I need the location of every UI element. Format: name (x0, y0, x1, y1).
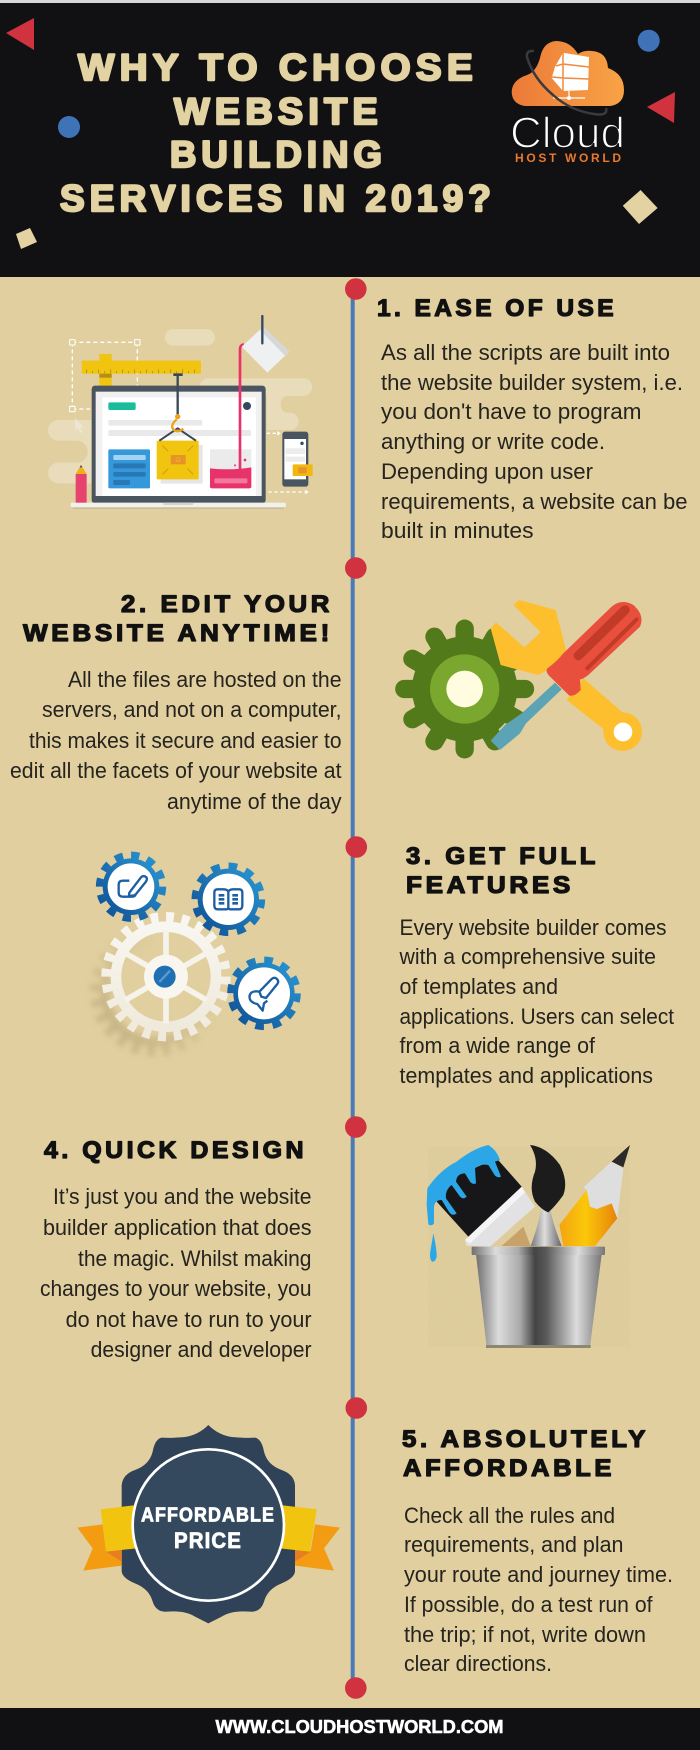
heading 5 (402, 1426, 649, 1482)
section 1 illustration: website construction (48, 316, 313, 509)
heading 3: FEATURES (406, 872, 574, 899)
icon: hook and crate (157, 373, 203, 484)
heading 5: 5. ABSOLUTELY (402, 1426, 649, 1453)
text block 1: the website builder system, i.e. (381, 370, 683, 395)
text block 5: the trip; if not, write down (404, 1622, 646, 1647)
icon: round brush (530, 1145, 565, 1246)
text block 4: changes to your website, you (40, 1276, 312, 1301)
ribbon folds (106, 1550, 311, 1562)
heading 2: 2. EDIT YOUR (121, 591, 333, 618)
text block 4 (40, 1184, 312, 1362)
heading 3 (406, 843, 599, 899)
ribbon band (101, 1505, 317, 1552)
logo: Cloud Host World (510, 41, 625, 165)
badge text: AFFORDABLE (141, 1504, 275, 1526)
icon: flat brush (427, 1145, 535, 1262)
title: BUILDING (170, 134, 387, 175)
title: WHY TO CHOOSE (78, 47, 478, 88)
gear shadow (96, 932, 214, 1051)
icon: green gear (404, 629, 525, 749)
footer URL: WWW.CLOUDHOSTWORLD.COM (216, 1717, 504, 1737)
text block 4: builder application that does (43, 1215, 312, 1240)
background blobs (48, 329, 312, 483)
title: WEBSITE (174, 91, 383, 132)
text block 3: templates and applications (400, 1063, 653, 1088)
text block 3 (399, 915, 675, 1088)
text block 3: of templates and (400, 974, 558, 999)
icon: metal bucket (472, 1247, 605, 1348)
icon: server building (552, 52, 589, 100)
icon: paint pail and pour (240, 316, 289, 470)
icon: orbit ring (527, 51, 606, 115)
icon: small gear with layout symbol (195, 866, 262, 933)
heading 4: 4. QUICK DESIGN (44, 1137, 307, 1164)
icon: crane ruler (82, 354, 201, 386)
text block 5: your route and journey time. (404, 1562, 673, 1587)
dashed arrows (267, 431, 309, 494)
text block 4: do not have to run to your (66, 1307, 312, 1332)
text block 2 (10, 667, 342, 814)
icon: large white gear (107, 917, 225, 1036)
icon: laptop (71, 386, 286, 509)
text block 3: from a wide range of (400, 1033, 596, 1058)
paint drips (427, 1145, 501, 1225)
blue card (108, 449, 150, 488)
heading 3: 3. GET FULL (406, 843, 599, 870)
heading 2: WEBSITE ANYTIME! (23, 620, 333, 647)
text block 5 (404, 1503, 673, 1676)
text block 1: built in minutes (381, 518, 534, 543)
heading 1: 1. EASE OF USE (377, 295, 617, 322)
text block 2: anytime of the day (167, 789, 342, 814)
section 3 illustration: gears (96, 855, 297, 1051)
text block 2: edit all the facets of your website at (10, 758, 342, 783)
text block 2: All the files are hosted on the (68, 667, 342, 692)
ribbon tails (77, 1524, 340, 1571)
text block 1: anything or write code. (381, 429, 605, 454)
icon: small gear with brush symbol (231, 960, 297, 1027)
icon: pencil (76, 465, 87, 503)
badge text: PRICE (174, 1528, 242, 1553)
heading 2 (23, 591, 333, 647)
text block 3: applications. Users can select (400, 1004, 675, 1029)
icon: cursor (75, 418, 84, 433)
text block 2: this makes it secure and easier to (29, 728, 342, 753)
text block 5: Check all the rules and (404, 1503, 615, 1528)
badge scalloped shape (122, 1425, 295, 1623)
text block 1 (381, 340, 688, 543)
text block 4: It’s just you and the website (53, 1184, 312, 1209)
text block 1: requirements, a website can be (381, 489, 688, 514)
header band (0, 0, 700, 277)
text block 5: If possible, do a test run of (404, 1592, 653, 1617)
footer bar (0, 1708, 700, 1750)
icon: screwdriver (491, 602, 641, 750)
text block 4: the magic. Whilst making (78, 1246, 312, 1271)
text block 1: Depending upon user (381, 459, 593, 484)
icon: orange cloud (512, 41, 624, 106)
title: SERVICES IN 2019? (60, 178, 496, 219)
section 5 illustration: affordable price badge (77, 1425, 340, 1623)
logo wordmark: Cloud (510, 108, 625, 158)
section 4 illustration: paint bucket with brushes (427, 1145, 630, 1348)
icon: wrench (491, 600, 642, 751)
timeline (345, 278, 367, 1699)
text block 2: servers, and not on a computer, (42, 697, 342, 722)
icon: small gear with edit symbol (99, 855, 163, 918)
text block 1: you don't have to program (381, 399, 642, 424)
icon: pencil (559, 1145, 630, 1246)
icon: phone (282, 432, 313, 487)
logo tagline: HOST WORLD (515, 151, 621, 165)
text block 5: clear directions. (404, 1651, 552, 1676)
text block 4: designer and developer (91, 1337, 312, 1362)
text block 3: with a comprehensive suite (399, 944, 656, 969)
section 2 illustration: gear and tools (404, 600, 642, 751)
decorative shapes in header (6, 18, 675, 249)
selection frame (70, 340, 140, 412)
title (60, 47, 496, 219)
pink card (210, 449, 251, 488)
text block 5: requirements, and plan (404, 1532, 624, 1557)
text block 3: Every website builder comes (400, 915, 666, 940)
text block 1: As all the scripts are built into (381, 340, 670, 365)
badge text (141, 1504, 275, 1553)
heading 5: AFFORDABLE (403, 1455, 615, 1482)
